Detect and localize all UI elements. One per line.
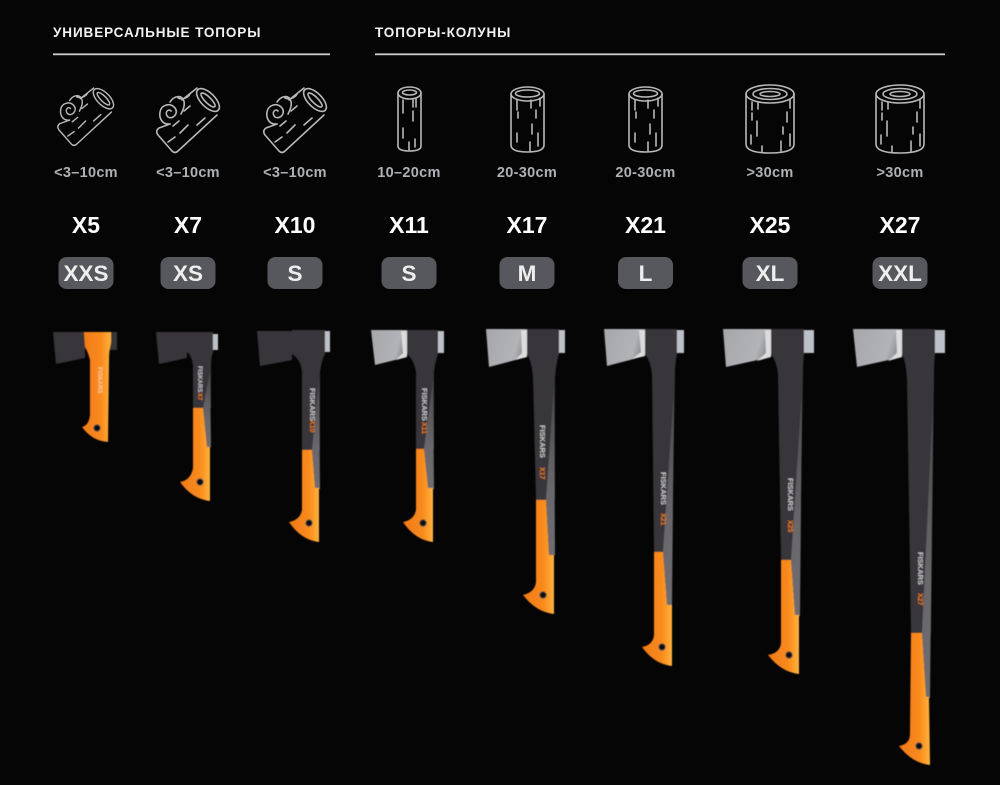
size badge XXL	[872, 257, 928, 289]
model names	[72, 212, 920, 238]
size badge L	[618, 257, 673, 289]
axe X17	[486, 329, 565, 614]
axe X10	[257, 330, 330, 542]
model names: X21	[625, 212, 666, 238]
size badge XXS: XXS	[63, 261, 109, 286]
axe X10: FISKARS	[308, 388, 317, 421]
icon: log X21	[629, 87, 662, 152]
size badge M: M	[518, 261, 536, 286]
icon: log X7	[157, 85, 223, 152]
axe X10: X10	[308, 420, 315, 433]
size badge XXL: XXL	[878, 261, 922, 286]
model names: X7	[174, 212, 202, 238]
size badge XL	[742, 257, 798, 289]
size badge XL: XL	[756, 261, 785, 286]
model names: X11	[389, 212, 429, 238]
icon: log X10	[264, 85, 330, 152]
axe X11	[371, 330, 444, 542]
log diameter labels: <3–10cm	[54, 165, 118, 181]
axe X27: FISKARS	[916, 552, 925, 585]
size badge L: L	[639, 261, 653, 286]
size badge S: S	[401, 261, 417, 286]
icon: log X5	[58, 85, 117, 145]
axe X17: FISKARS	[538, 425, 547, 458]
log diameter labels: >30cm	[876, 165, 924, 181]
axe X25: FISKARS	[786, 478, 795, 511]
log diameter labels: 20-30cm	[497, 165, 557, 181]
axe X27: X27	[916, 593, 923, 606]
log diameter labels: <3–10cm	[263, 165, 327, 181]
heading: universal axes: УНИВЕРСАЛЬНЫЕ ТОПОРЫ	[53, 25, 261, 40]
axe X27	[853, 329, 945, 765]
model names: X25	[750, 212, 791, 238]
icon: log X25	[746, 85, 794, 153]
size badge XS: XS	[173, 261, 203, 286]
log diameter labels: <3–10cm	[156, 165, 220, 181]
axe X21: FISKARS	[659, 472, 668, 505]
axe X11: FISKARS	[420, 388, 429, 421]
axe X21: X21	[659, 513, 666, 526]
axe X25: X25	[786, 520, 793, 533]
size badge S	[268, 257, 322, 289]
heading: splitting axes: ТОПОРЫ-КОЛУНЫ	[375, 25, 511, 40]
log diameter labels: 10–20cm	[377, 165, 441, 181]
axe X7: X7	[196, 393, 202, 401]
axe X5: FISKARS	[96, 367, 102, 393]
icon: log X27	[876, 85, 924, 153]
size badge S	[382, 257, 436, 289]
axe X25	[723, 329, 814, 674]
model names: X10	[275, 212, 315, 238]
axe X21	[604, 329, 684, 666]
log diameter labels: >30cm	[746, 165, 794, 181]
size badge XS	[160, 257, 216, 289]
size badge XXS	[58, 257, 114, 289]
axe X7	[156, 332, 218, 501]
size badge S: S	[287, 261, 303, 286]
size badge M	[500, 257, 554, 289]
model names: X5	[72, 212, 100, 238]
axe X11: X11	[420, 422, 427, 434]
model names: X17	[507, 212, 547, 238]
log diameter labels: 20-30cm	[615, 165, 676, 181]
axe X7: FISKARS	[196, 366, 202, 392]
icon: log X11	[398, 87, 421, 151]
log diameter labels	[54, 165, 924, 181]
icon: log X17	[511, 87, 544, 152]
axe X17: X17	[538, 467, 545, 480]
axe X5	[53, 332, 117, 442]
model names: X27	[880, 212, 920, 238]
